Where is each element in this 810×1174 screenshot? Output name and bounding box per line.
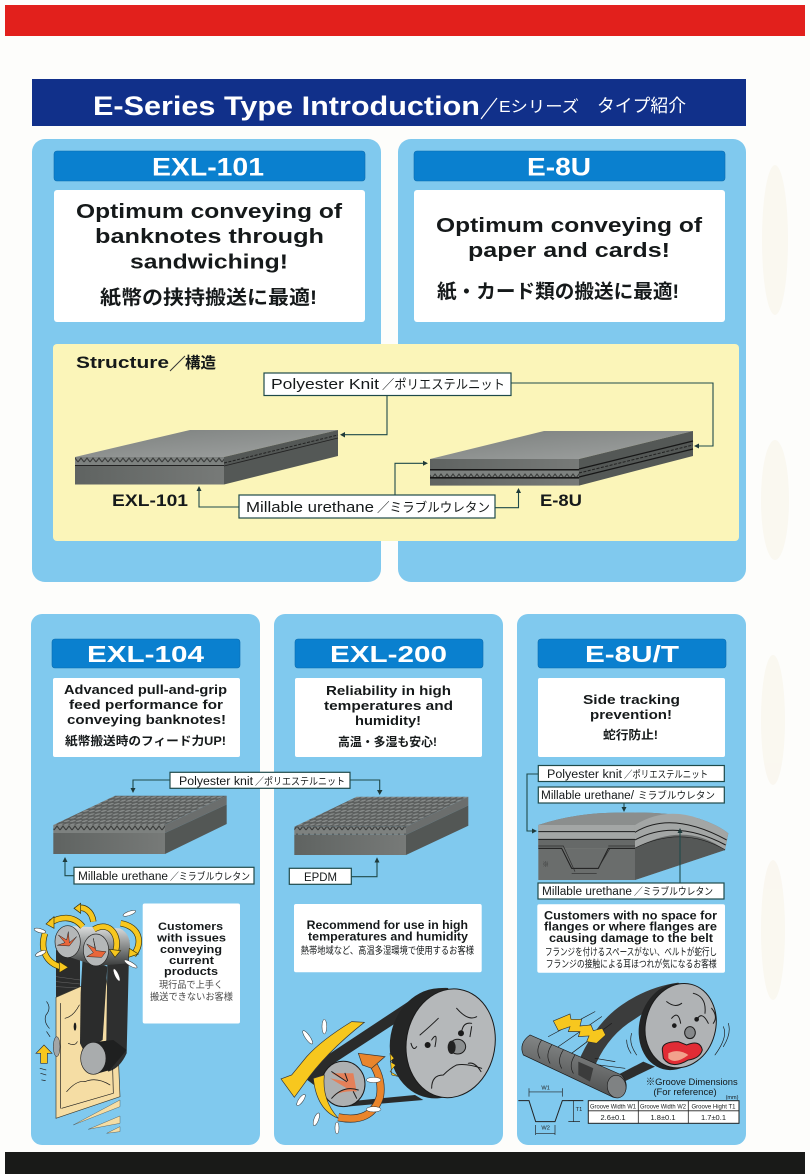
label: millable urethane with arrows: ／ミラブルウレタン bbox=[377, 500, 490, 515]
text block: EXL-101 feature: 紙幣の挟持搬送に最適! bbox=[100, 287, 317, 309]
chart: groove profile: T1 bbox=[576, 1107, 582, 1113]
label: EPDM, EXL-200: EPDM bbox=[304, 872, 337, 884]
text block: flange damage customers: causing damage to the belt bbox=[549, 933, 713, 945]
title banner: E-Series Type Introduction bbox=[93, 91, 480, 121]
text block: EXL-104 feature: 紙幣搬送時のフィード力UP! bbox=[65, 733, 226, 748]
belt diagram: E-8U/T bbox=[538, 813, 728, 880]
label: polyester knit, EXL-104 and EXL-200: Polyester knit bbox=[179, 776, 254, 788]
text block: E-8U/T feature: Side tracking bbox=[583, 693, 680, 707]
panel: structure bbox=[53, 344, 739, 541]
table: groove dimensions: 1.8±0.1 bbox=[651, 1113, 675, 1122]
title banner bbox=[32, 79, 746, 126]
labels: E-8U/T layers with arrows: ／ミラブルウレタン bbox=[634, 885, 713, 898]
text block: EXL-200 feature: temperatures and bbox=[324, 699, 453, 713]
panel: EXL-104 bbox=[31, 614, 260, 1145]
belt diagram: EXL-200 bbox=[294, 797, 468, 855]
text block: EXL-104 feature: Advanced pull-and-grip bbox=[64, 683, 227, 697]
belt diagram: E-8U bbox=[430, 431, 693, 486]
heading: E-8U: E-8U bbox=[527, 154, 591, 182]
label: EXL-101: EXL-101 bbox=[112, 491, 188, 510]
table: groove dimensions: Groove Hight T1 bbox=[692, 1104, 736, 1110]
labels: E-8U/T layers with arrows: Polyester knit bbox=[547, 769, 623, 781]
text block: E-8U feature: 紙・カード類の搬送に最適! bbox=[437, 281, 679, 303]
labels: E-8U/T layers with arrows: ／ポリエステルニット bbox=[624, 769, 708, 781]
table: groove dimensions: 2.6±0.1 bbox=[601, 1113, 625, 1122]
text block: EXL-104 feature: feed performance for bbox=[69, 698, 223, 712]
heading: EXL-104: EXL-104 bbox=[87, 641, 204, 667]
scan smudges on the right margin bbox=[761, 165, 789, 1000]
heading: structure: Structure bbox=[76, 353, 169, 372]
belt diagram: EXL-101 bbox=[75, 430, 338, 484]
table: groove dimensions: 1.7±0.1 bbox=[701, 1113, 726, 1122]
heading: EXL-101: EXL-101 bbox=[152, 154, 264, 182]
labels: E-8U/T layers with arrows: ミラブルウレタン bbox=[638, 789, 715, 802]
panel: E-8U/T bbox=[517, 614, 746, 1145]
heading: EXL-200 bbox=[295, 639, 483, 668]
label: polyester knit with arrows bbox=[264, 373, 713, 448]
text block: recommended use: Recommend for use in high bbox=[307, 920, 468, 932]
text block: flange damage customers: Customers with no space for bbox=[544, 910, 718, 922]
chart: groove profile bbox=[518, 1085, 583, 1135]
text block: customers with issues: products bbox=[164, 966, 218, 978]
panel: EXL-101 bbox=[32, 139, 381, 582]
text block: E-8U/T feature: 蛇行防止! bbox=[603, 727, 658, 742]
note: groove dimensions: (mm) bbox=[726, 1095, 739, 1101]
text block: recommended use: temperatures and humidity bbox=[308, 932, 469, 944]
title banner: Eシリーズ bbox=[499, 98, 579, 116]
text block: customers with issues: current bbox=[169, 955, 214, 967]
text block: E-8U feature: paper and cards! bbox=[468, 240, 670, 262]
label: millable urethane with arrows: Millable urethane bbox=[246, 499, 374, 516]
text block: flange damage customers: フランジの接触による耳ほつれが気になるお客様 bbox=[546, 957, 717, 970]
heading: EXL-200: EXL-200 bbox=[330, 641, 447, 667]
belt diagram: EXL-104 bbox=[53, 796, 227, 854]
text block: customers with issues: with issues bbox=[156, 932, 226, 944]
table: groove dimensions: Groove Width W2 bbox=[640, 1104, 686, 1110]
label: millable urethane with arrows bbox=[196, 461, 521, 518]
text block: EXL-104 feature: conveying banknotes! bbox=[67, 713, 226, 727]
illustration: banknote jammed between rollers bbox=[34, 903, 139, 1133]
text block: EXL-200 feature bbox=[295, 678, 482, 757]
text block: EXL-101 feature: banknotes through bbox=[95, 226, 324, 248]
label: polyester knit, EXL-104 and EXL-200: ／ポリエステルニット bbox=[255, 776, 345, 788]
label: millable urethane, EXL-104 bbox=[62, 857, 254, 884]
text block: recommended use bbox=[294, 904, 482, 972]
text block: customers with issues: Customers bbox=[158, 921, 223, 933]
heading: structure bbox=[76, 353, 217, 372]
text block: customers with issues: 搬送できないお客様 bbox=[150, 991, 233, 1003]
label: E-8U: E-8U bbox=[540, 491, 582, 510]
labels: E-8U/T layers with arrows: Millable urethane bbox=[542, 886, 632, 898]
heading: structure: 構造 bbox=[185, 353, 217, 372]
text block: E-8U feature bbox=[414, 190, 725, 322]
text block: E-8U/T feature bbox=[538, 678, 725, 757]
label: polyester knit with arrows: Polyester Knit bbox=[271, 376, 380, 393]
black bottom band bbox=[5, 1152, 805, 1174]
label: EPDM, EXL-200 bbox=[289, 857, 380, 884]
text block: customers with issues bbox=[143, 904, 240, 1024]
heading: E-8U/T bbox=[538, 639, 726, 668]
red top band bbox=[5, 5, 805, 36]
labels: E-8U/T layers with arrows bbox=[527, 766, 724, 899]
text block: EXL-200 feature: humidity! bbox=[355, 714, 421, 728]
text block: customers with issues: 現行品で上手く bbox=[159, 979, 223, 991]
label: polyester knit, EXL-104 and EXL-200 bbox=[130, 772, 382, 795]
text block: flange damage customers bbox=[537, 904, 725, 973]
panel: E-8U bbox=[398, 139, 746, 582]
chart: groove profile: W1 bbox=[541, 1085, 550, 1091]
heading: EXL-104 bbox=[52, 639, 240, 668]
label: millable urethane, EXL-104: Millable urethane bbox=[78, 871, 168, 883]
label: millable urethane, EXL-104: ／ミラブルウレタン bbox=[170, 870, 250, 883]
title banner: タイプ紹介 bbox=[597, 96, 686, 116]
text block: E-8U feature: Optimum conveying of bbox=[436, 215, 702, 237]
text block: flange damage customers: flanges or where flanges are bbox=[544, 922, 717, 934]
labels: E-8U/T layers with arrows: Millable urethane/ bbox=[541, 790, 635, 802]
illustration: belt tracking damage bbox=[522, 975, 729, 1099]
note: groove dimensions: ※Groove Dimensions bbox=[646, 1077, 738, 1088]
note: groove dimensions bbox=[646, 1077, 739, 1101]
table: groove dimensions bbox=[588, 1101, 739, 1123]
text block: E-8U/T feature: prevention! bbox=[590, 708, 672, 722]
text block: customers with issues: conveying bbox=[160, 944, 222, 956]
text block: EXL-200 feature: Reliability in high bbox=[326, 684, 451, 698]
illustration: pulleys overheating bbox=[281, 981, 504, 1134]
table: groove dimensions: Groove Width W1 bbox=[590, 1104, 636, 1110]
belt diagram: E-8U/T: ※ bbox=[542, 862, 549, 869]
text block: flange damage customers: フランジを付けるスペースがない、ベルトが蛇行し bbox=[545, 946, 717, 959]
heading: E-8U bbox=[414, 151, 725, 182]
text block: EXL-101 feature: Optimum conveying of bbox=[76, 201, 342, 223]
label: polyester knit with arrows: ／ポリエステルニット bbox=[382, 377, 505, 392]
text block: EXL-200 feature: 高温・多湿も安心! bbox=[338, 734, 437, 749]
heading: EXL-101 bbox=[54, 151, 365, 182]
text block: EXL-104 feature bbox=[53, 678, 240, 757]
heading: E-8U/T: E-8U/T bbox=[585, 641, 680, 667]
text block: recommended use: 熱帯地域など、高温多湿環境で使用するお客様 bbox=[301, 944, 474, 957]
chart: groove profile: W2 bbox=[541, 1125, 550, 1131]
panel: EXL-200 bbox=[274, 614, 504, 1145]
text block: EXL-101 feature: sandwiching! bbox=[130, 252, 288, 274]
text block: EXL-101 feature bbox=[54, 190, 365, 322]
note: groove dimensions: (For reference) bbox=[653, 1087, 717, 1098]
